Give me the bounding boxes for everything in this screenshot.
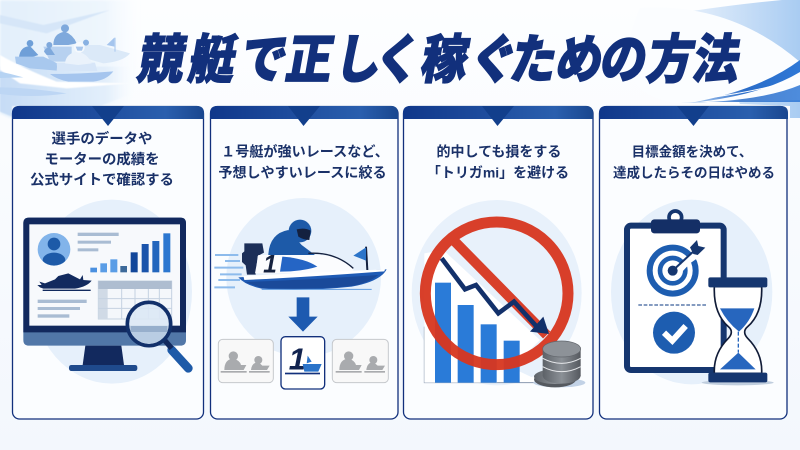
front rider xyxy=(65,52,92,65)
prohibition sign xyxy=(425,222,568,365)
middle rider xyxy=(61,24,69,32)
panel: pick predictable races xyxy=(210,106,398,419)
panel text: １号艇が強いレースなど、 xyxy=(221,144,389,160)
panel header band xyxy=(210,106,398,119)
panel text: 的中しても損をする xyxy=(437,144,561,160)
engine xyxy=(242,243,264,275)
panel: check data xyxy=(12,106,204,419)
title: 競艇で正しく稼ぐための方法 xyxy=(134,30,745,90)
falling arrow xyxy=(442,258,549,334)
panel text: 選手のデータや xyxy=(52,130,152,148)
panel: goal and stop xyxy=(599,106,788,419)
left rider xyxy=(27,40,33,47)
panel text: 公式サイトで確認する xyxy=(30,172,174,188)
falling bars xyxy=(435,283,520,383)
panel header band xyxy=(403,106,593,119)
arrow xyxy=(288,297,318,332)
icon: boat xyxy=(37,273,92,291)
panel text: 予想しやすいレースに絞る xyxy=(218,164,387,180)
left option box xyxy=(218,339,273,383)
header notch xyxy=(92,106,124,126)
chart area xyxy=(424,327,543,383)
header notch xyxy=(677,106,709,126)
panel text: モーターの成績を xyxy=(44,150,160,168)
illustration: race boat xyxy=(214,198,388,389)
rear boat xyxy=(80,45,130,63)
panel: avoid torigami xyxy=(403,106,593,419)
right top swoosh xyxy=(628,0,800,118)
header notch xyxy=(288,106,320,126)
icon: magnifier xyxy=(127,302,188,368)
rider xyxy=(268,230,315,258)
illustration: race boat: 1 xyxy=(263,251,277,278)
selected option box xyxy=(281,337,325,389)
icon: check xyxy=(653,312,695,354)
panel header band xyxy=(599,106,788,119)
header notch xyxy=(482,106,514,126)
illustration: clipboard and hourglass xyxy=(611,200,774,385)
illustration: no falling chart xyxy=(412,200,585,387)
panel header band xyxy=(12,106,204,119)
icon: monitor with data xyxy=(23,200,192,384)
icon: hourglass xyxy=(702,277,774,385)
right option box xyxy=(332,339,388,383)
panel text: 「トリガmi」を避ける xyxy=(427,164,569,180)
boat body xyxy=(255,255,353,273)
left top boat racing illustration xyxy=(0,0,140,118)
table xyxy=(98,281,172,319)
panel text: 目標金額を決めて、 xyxy=(632,144,752,160)
front boat xyxy=(57,63,97,71)
icon: target xyxy=(650,240,707,294)
bar chart xyxy=(90,233,170,272)
dashed divider xyxy=(638,303,708,307)
speed lines xyxy=(214,255,243,287)
panel text: 達成したらその日はやめる xyxy=(613,164,775,180)
icon: coins xyxy=(533,341,585,387)
clipboard xyxy=(627,211,724,370)
selected option box: 1 xyxy=(289,342,306,376)
